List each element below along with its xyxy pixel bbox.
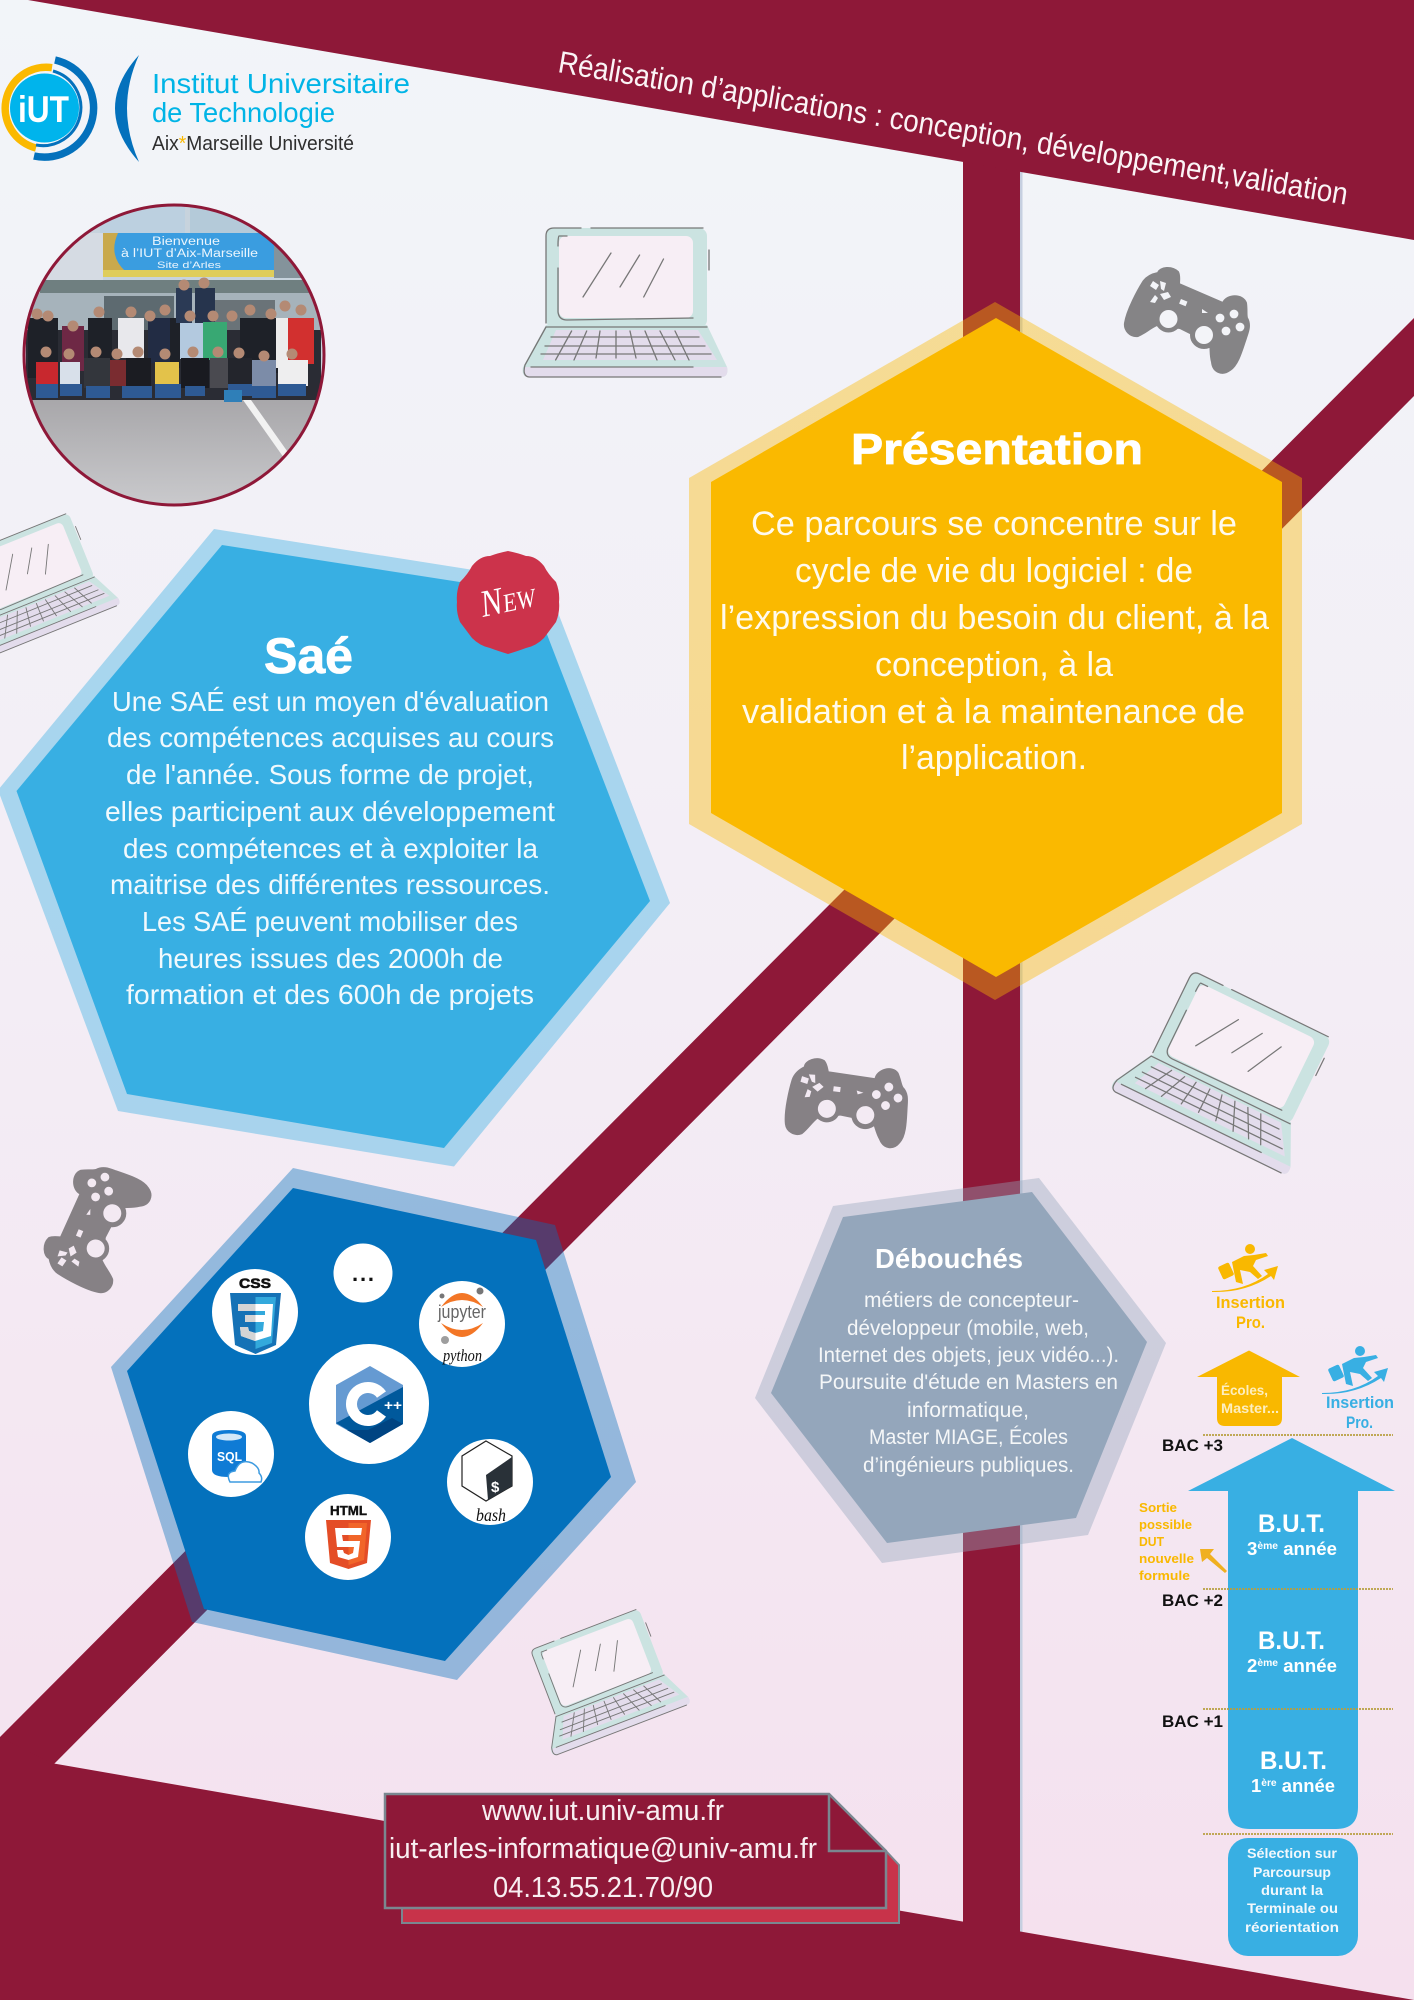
text: présentation body [720, 505, 1269, 777]
text: SAÉ body: Une SAÉ est un moyen d'évaluation [112, 686, 549, 717]
box: sélection parcoursup: Sélection sur [1247, 1845, 1338, 1861]
icon: SQL cloud: SQL [217, 1449, 242, 1464]
box: sélection parcoursup: durant la [1261, 1882, 1323, 1898]
text: débouchés body: métiers de concepteur- [864, 1289, 1079, 1312]
text: B.U.T. 1re année: B.U.T. [1260, 1747, 1327, 1775]
icon: HTML5: HTML [330, 1503, 367, 1518]
icon: laptop top [523, 228, 727, 377]
icon: CSS3 [212, 1269, 298, 1355]
icon: HTML5 [305, 1494, 391, 1580]
icon: C++ [309, 1344, 429, 1464]
text: insertion pro blue: Insertion [1326, 1393, 1394, 1412]
icon: laptop right [1110, 961, 1349, 1176]
labels: BAC levels: BAC +3 [1162, 1436, 1223, 1455]
arrow: sortie DUT [1200, 1549, 1227, 1573]
text: sortie possible DUT [1139, 1500, 1194, 1583]
text: débouchés body: informatique, [907, 1399, 1029, 1422]
labels: BAC levels: BAC +2 [1162, 1591, 1223, 1610]
box: sélection parcoursup [1228, 1838, 1358, 1956]
text: débouchés body: Poursuite d'étude en Masters en [819, 1371, 1118, 1394]
text: présentation body: Ce parcours se concentre sur le [751, 505, 1237, 543]
panel: B.U.T. pathway diagram [1139, 1244, 1395, 1956]
arrow: écoles master: Écoles, [1221, 1382, 1268, 1398]
text: présentation body: conception, à la [875, 646, 1113, 684]
icon: Jupyter python: jupyter [437, 1302, 486, 1322]
text: B.U.T. 1re année: année [1277, 1776, 1335, 1796]
text: présentation body: l’expression du besoin du client, à la [720, 599, 1269, 637]
icon: laptop left [0, 507, 121, 658]
text: contact details: iut-arles-informatique@univ-amu.fr [389, 1833, 817, 1865]
text: contact details: 04.13.55.21.70/90 [493, 1872, 713, 1904]
text: présentation body: l’application. [901, 739, 1087, 777]
group photo in circle: Bienvenue [152, 236, 220, 248]
text: B.U.T. 1re année [1251, 1747, 1335, 1796]
labels: BAC levels: BAC +1 [1162, 1712, 1223, 1731]
text: B.U.T. 2e année [1247, 1627, 1337, 1676]
text: sortie possible DUT: Sortie [1139, 1500, 1177, 1515]
text: débouchés body: Master MIAGE, Écoles [869, 1426, 1068, 1449]
group photo in circle: à l’IUT d’Aix-Marseille [121, 248, 258, 260]
text: débouchés body: d’ingénieurs publiques. [863, 1454, 1074, 1477]
icon: blue runner [1322, 1346, 1388, 1394]
text: contact details [389, 1795, 817, 1904]
text: B.U.T. 2e année: ème [1257, 1658, 1278, 1669]
text: insertion pro blue: Pro. [1346, 1413, 1373, 1432]
text: B.U.T. 1re année: ère [1261, 1778, 1277, 1789]
heading: débouchés: Débouchés [875, 1243, 1023, 1274]
panel: présentation hexagon [689, 302, 1302, 1000]
text: B.U.T. 3e année [1247, 1510, 1337, 1559]
logo IUT Aix-Marseille: Aix*Marseille Université [152, 133, 354, 155]
text: SAÉ body: de l'année. Sous forme de projet, [126, 759, 534, 790]
icon: more technologies: ... [352, 1261, 374, 1286]
text: B.U.T. 3e année: B.U.T. [1258, 1510, 1325, 1538]
heading: présentation: Présentation [851, 425, 1143, 474]
text: SAÉ body: maitrise des différentes ressources. [110, 869, 550, 900]
icon: Jupyter python [419, 1281, 505, 1367]
text: sortie possible DUT: possible [1139, 1517, 1192, 1532]
logo IUT Aix-Marseille: Institut Universitaire [152, 68, 410, 99]
arrow: écoles master: Master... [1221, 1400, 1279, 1416]
icon: game controller top right [1125, 268, 1249, 373]
text: SAÉ body: heures issues des 2000h de [158, 943, 503, 974]
text: SAÉ body: elles participent aux développement [105, 796, 555, 827]
icon: C++: ++ [384, 1397, 402, 1413]
logo IUT Aix-Marseille [5, 55, 410, 162]
icon: orange runner [1212, 1244, 1278, 1292]
text: SAÉ body: des compétences et à exploiter la [123, 833, 538, 864]
text: B.U.T. 2e année: B.U.T. [1258, 1627, 1325, 1655]
icon: bash [447, 1439, 533, 1525]
text: présentation body: cycle de vie du logiciel : de [795, 552, 1193, 590]
text: débouchés body: Internet des objets, jeux vidéo...). [818, 1344, 1119, 1367]
logo IUT Aix-Marseille: iUT [18, 89, 69, 130]
panel: SAÉ hexagon [0, 529, 670, 1166]
text: insertion pro blue [1326, 1393, 1394, 1432]
text: SAÉ body: des compétences acquises au cours [107, 722, 554, 753]
box: sélection parcoursup: réorientation [1245, 1919, 1339, 1935]
heading: Saé: Saé [264, 628, 353, 684]
text: débouchés body: développeur (mobile, web, [847, 1317, 1089, 1340]
text: B.U.T. 2e année: 2 [1247, 1656, 1257, 1676]
panel: débouchés hexagon [755, 1178, 1166, 1563]
icon: game controller left [44, 1167, 151, 1293]
text: B.U.T. 3e année: année [1278, 1539, 1337, 1559]
text: B.U.T. 2e année: année [1278, 1656, 1337, 1676]
arrow: B.U.T. main blue arrow [1188, 1438, 1395, 1829]
text: SAÉ body [105, 686, 555, 1010]
text: sortie possible DUT: nouvelle [1139, 1551, 1194, 1566]
panel: technologies hexagon [111, 1168, 636, 1680]
icon: more technologies [334, 1244, 392, 1302]
text: présentation body: validation et à la maintenance de [742, 693, 1245, 731]
text: insertion pro orange: Pro. [1236, 1313, 1265, 1332]
text: B.U.T. 1re année: 1 [1251, 1776, 1261, 1796]
text: débouchés body [818, 1289, 1119, 1477]
group photo in circle: Site d’Arles [157, 260, 221, 271]
group photo in circle [20, 200, 330, 510]
labels: BAC levels [1162, 1436, 1223, 1731]
box: sélection parcoursup: Parcoursup [1253, 1864, 1331, 1880]
icon: SQL cloud [188, 1411, 274, 1497]
arrow: écoles master [1197, 1350, 1300, 1426]
icon: game controller centre [772, 1039, 919, 1172]
text: contact details: www.iut.univ-amu.fr [481, 1795, 724, 1827]
text: sortie possible DUT: DUT [1139, 1534, 1164, 1549]
icon: bash: $ [491, 1479, 500, 1496]
text: SAÉ body: Les SAÉ peuvent mobiliser des [142, 906, 518, 937]
icon: CSS3: CSS [239, 1275, 271, 1291]
contact note card [385, 1794, 899, 1923]
icon: bash: bash [476, 1505, 506, 1525]
box: sélection parcoursup: Terminale ou [1247, 1900, 1338, 1916]
text: sortie possible DUT: formule [1139, 1568, 1190, 1583]
text: SAÉ body: formation et des 600h de projets [126, 979, 534, 1010]
text: insertion pro orange: Insertion [1216, 1293, 1285, 1312]
badge: New: NEW [475, 573, 541, 626]
icon: Jupyter python: python [442, 1346, 482, 1365]
text: B.U.T. 3e année: ème [1257, 1541, 1278, 1552]
badge: New [457, 551, 559, 654]
icon: laptop bottom [515, 1603, 691, 1756]
text: insertion pro orange [1216, 1293, 1285, 1332]
text: B.U.T. 3e année: 3 [1247, 1539, 1257, 1559]
logo IUT Aix-Marseille: de Technologie [152, 97, 335, 128]
